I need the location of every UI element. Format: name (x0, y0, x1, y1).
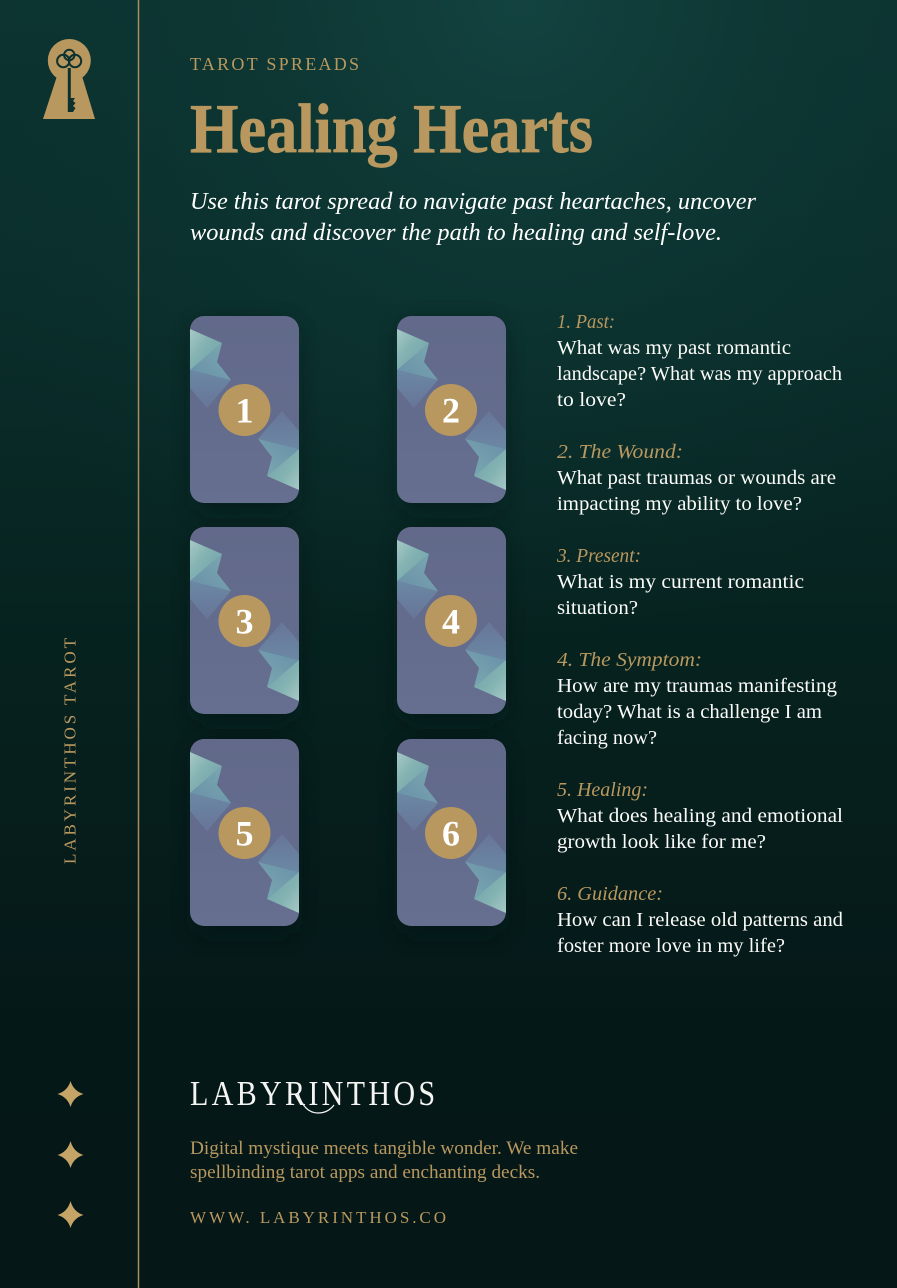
position 3 text (556, 545, 804, 619)
position 5 text: What does healing and emotional (557, 805, 843, 827)
position 1 text (557, 311, 842, 411)
website: WWW. LABYRINTHOS.CO (190, 1208, 446, 1227)
position 6 text: 6. Guidance: (557, 883, 663, 905)
logo wordmark: LABYRINTHOS (190, 1075, 435, 1114)
subtitle: wounds and discover the path to healing and self-love. (190, 219, 722, 246)
position 1 text: 1. Past: (557, 311, 615, 333)
position 1 text: to love? (557, 389, 626, 411)
position 2 text: What past traumas or wounds are (557, 467, 836, 489)
subtitle: Use this tarot spread to navigate past heartaches, uncover (190, 188, 756, 215)
position 4 text: How are my traumas manifesting (557, 675, 837, 697)
card 2: 2 (442, 390, 460, 430)
position 6 text: foster more love in my life? (557, 935, 785, 957)
position 4 text (557, 649, 837, 749)
position 6 text (557, 883, 843, 957)
card 4: 4 (442, 602, 460, 642)
card 5: 5 (236, 814, 254, 854)
card 1 (190, 316, 299, 511)
card 6 (397, 739, 506, 934)
position 4 text: facing now? (557, 727, 657, 749)
card 6: 6 (442, 814, 460, 854)
position 1 text: What was my past romantic (557, 337, 791, 359)
position 5 text: 5. Healing: (557, 779, 648, 801)
card 1: 1 (236, 390, 254, 430)
card 2 (397, 316, 506, 511)
icon: sparkles (58, 1081, 84, 1228)
position 2 text (557, 441, 836, 515)
icon: keyhole with key (43, 39, 95, 119)
footer description (190, 1139, 578, 1183)
card 3 (190, 527, 299, 722)
position 5 text (557, 779, 843, 853)
position 1 text: landscape? What was my approach (557, 363, 842, 385)
footer description: spellbinding tarot apps and enchanting decks. (190, 1163, 540, 1183)
vertical brand label: LABYRINTHOS TAROT (60, 637, 80, 864)
footer description: Digital mystique meets tangible wonder. We make (190, 1139, 578, 1159)
card 5 (190, 739, 299, 934)
card 3: 3 (236, 602, 254, 642)
position 4 text: today? What is a challenge I am (557, 701, 822, 723)
position 3 text: situation? (557, 597, 638, 619)
position 3 text: What is my current romantic (557, 571, 804, 593)
position 5 text: growth look like for me? (557, 831, 766, 853)
card 4 (397, 527, 506, 722)
eyebrow: TAROT SPREADS (190, 54, 359, 74)
position 2 text: 2. The Wound: (557, 441, 683, 463)
position 6 text: How can I release old patterns and (557, 909, 843, 931)
position 2 text: impacting my ability to love? (557, 493, 802, 515)
position 4 text: 4. The Symptom: (557, 649, 702, 671)
title: Healing Hearts (190, 91, 593, 168)
subtitle (190, 188, 756, 246)
position 3 text: 3. Present: (556, 545, 641, 567)
